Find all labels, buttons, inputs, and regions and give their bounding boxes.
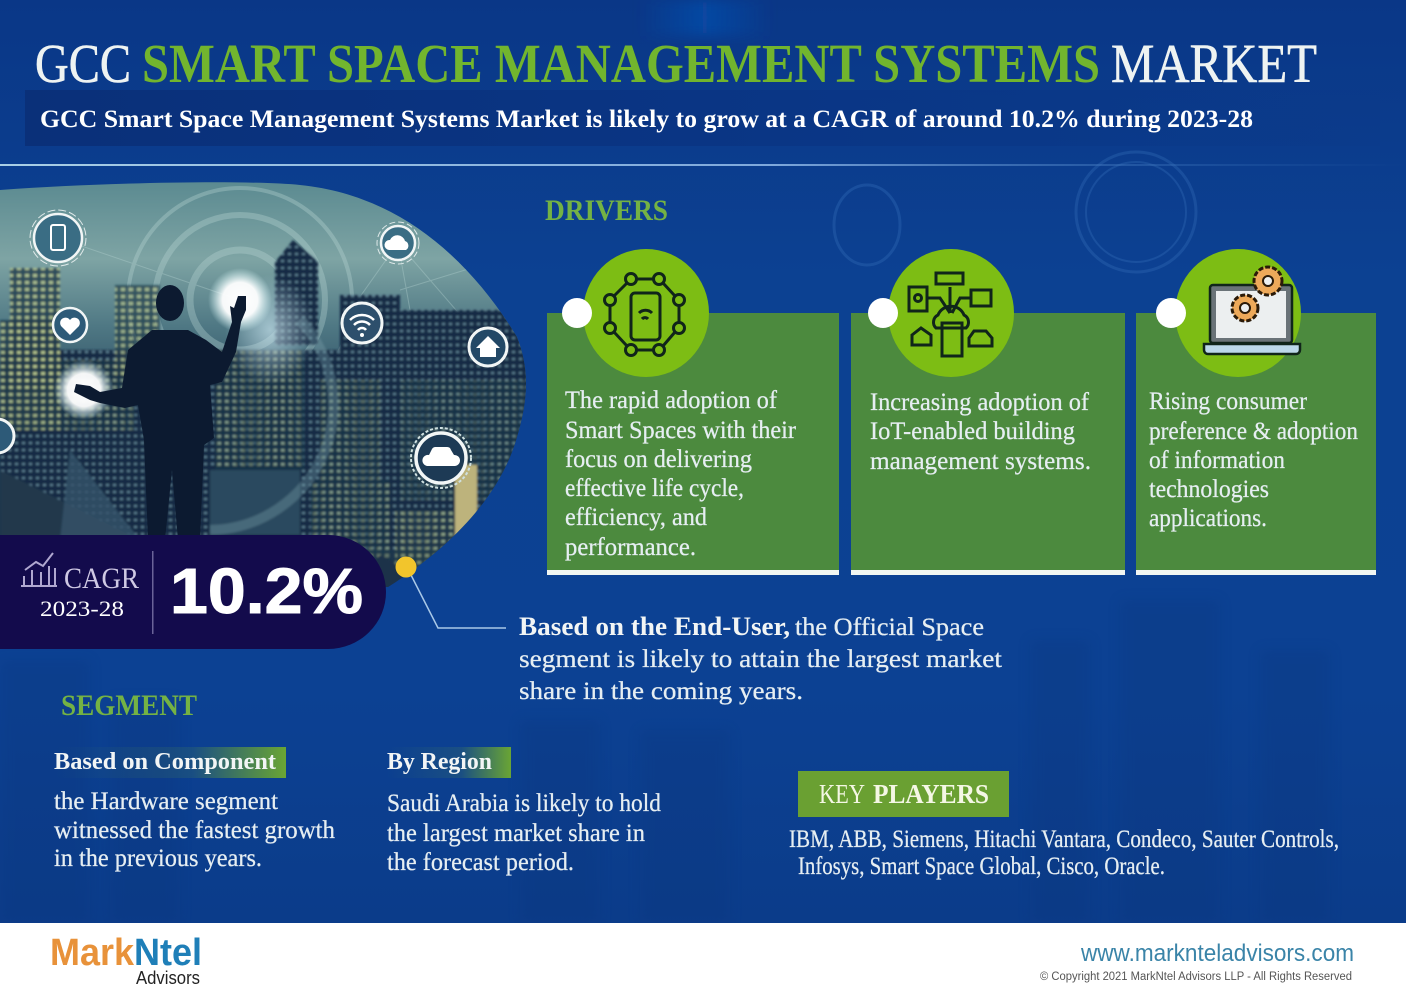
icon: phone network	[604, 274, 684, 356]
icon: cloud	[377, 222, 419, 264]
logo: Ntel	[134, 932, 202, 974]
panel: driver 3: technologies	[1149, 476, 1269, 503]
icon: heart	[53, 308, 87, 342]
title: SMART SPACE MANAGEMENT SYSTEMS	[142, 33, 1100, 94]
segment: component: the Hardware segment	[54, 788, 278, 815]
segment: region: the largest market share in	[387, 820, 645, 847]
CAGR badge: 2023-28	[40, 596, 124, 621]
CAGR badge: CAGR	[64, 562, 139, 595]
callout: connector	[396, 556, 506, 628]
callout: end-user text: Based on the End-User,	[519, 612, 790, 641]
panel: driver 3: of information	[1149, 447, 1285, 474]
CAGR badge: 10.2%	[170, 555, 363, 627]
callout: end-user text: share in the coming years.	[519, 678, 803, 705]
panel: driver 3: preference & adoption	[1149, 418, 1358, 445]
panel: driver 2: Increasing adoption of	[870, 389, 1090, 416]
panel: driver 1: effective life cycle,	[565, 475, 744, 502]
footer	[0, 923, 1406, 997]
businessman silhouette	[74, 285, 246, 540]
panel: driver 3	[1136, 249, 1376, 575]
segment: component	[54, 747, 335, 872]
segment: component: in the previous years.	[54, 845, 262, 872]
skyline	[0, 240, 530, 592]
footer: www.marknteladvisors.com	[1080, 940, 1354, 967]
panel: driver 2	[851, 249, 1125, 575]
title: MARKET	[1111, 33, 1317, 94]
panel: driver 1: The rapid adoption of	[565, 387, 778, 414]
panel: driver 1: performance.	[565, 534, 696, 561]
glowing hands	[208, 268, 272, 332]
segment: region: the forecast period.	[387, 849, 574, 876]
heading: segment: SEGMENT	[61, 689, 197, 722]
icon: partial ring	[0, 419, 14, 453]
callout: end-user text: segment is likely to attain the largest market	[519, 646, 1002, 673]
icon: IoT devices	[909, 273, 992, 356]
icon: car	[411, 428, 471, 488]
panel: driver 1: efficiency, and	[565, 504, 707, 531]
icon: home	[469, 328, 507, 366]
segment: region: Saudi Arabia is likely to hold	[387, 790, 661, 817]
subtitle band	[25, 90, 1380, 146]
icon: wifi	[342, 303, 382, 343]
logo: Advisors	[136, 968, 200, 988]
key players: KEY	[819, 779, 865, 809]
key players	[789, 771, 1339, 880]
callout: end-user text: the Official Space	[795, 614, 984, 641]
subtitle band: GCC Smart Space Management Systems Market is likely to grow at a CAGR of around 10.2% during 2023-28	[40, 106, 1253, 133]
photo: businessman and smart city	[0, 175, 530, 595]
segment: component: Based on Component	[54, 749, 276, 775]
callout: end-user text	[519, 612, 1002, 705]
panel: driver 2: management systems.	[870, 448, 1091, 475]
heading: drivers: DRIVERS	[545, 194, 668, 227]
segment: region	[387, 747, 661, 876]
key players: PLAYERS	[873, 779, 989, 809]
icon: smartphone	[30, 210, 86, 266]
icon: growth chart	[21, 553, 57, 586]
panel: driver 2: IoT-enabled building	[870, 418, 1075, 445]
footer: © Copyright 2021 MarkNtel Advisors LLP - All Rights Reserved	[1040, 971, 1352, 983]
panel: driver 3: Rising consumer	[1149, 388, 1308, 415]
logo: Mark	[50, 932, 135, 974]
panel: driver 1: Smart Spaces with their	[565, 417, 797, 444]
title: GCC	[35, 33, 131, 94]
panel: driver 1	[547, 249, 839, 575]
key players: Infosys, Smart Space Global, Cisco, Oracle.	[798, 853, 1165, 880]
segment: component: witnessed the fastest growth	[54, 817, 335, 844]
icon: laptop with gears	[1204, 267, 1300, 354]
logo	[50, 932, 202, 988]
panel: driver 1: focus on delivering	[565, 446, 752, 473]
network arcs	[82, 186, 466, 351]
segment: region: By Region	[387, 749, 492, 775]
panel: driver 3: applications.	[1149, 505, 1267, 532]
CAGR badge	[0, 535, 386, 649]
